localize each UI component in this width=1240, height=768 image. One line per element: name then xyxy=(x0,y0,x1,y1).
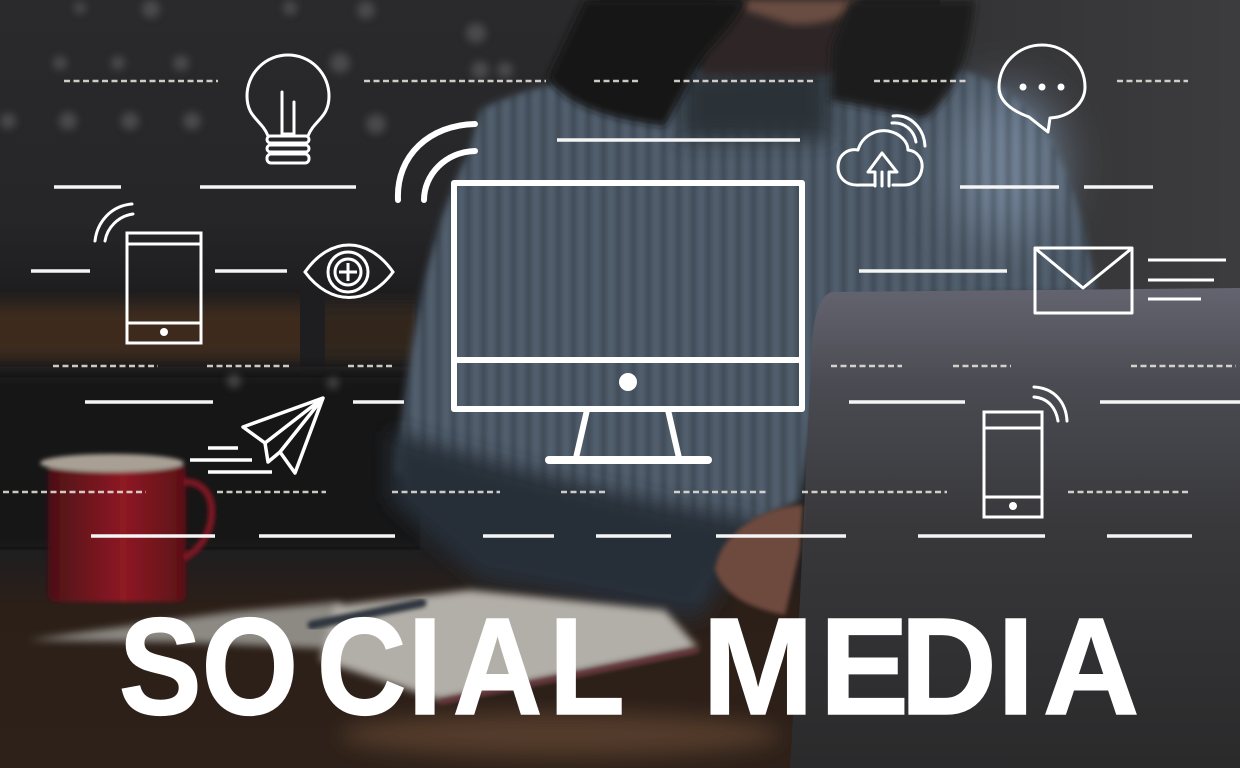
sweater shoulder highlight xyxy=(950,90,1060,240)
skin xyxy=(745,0,860,24)
background: table highlight xyxy=(340,713,780,757)
icon: wifi arcs by monitor xyxy=(398,124,475,200)
icon: envelope with lines xyxy=(1035,248,1226,313)
background: wooden shelf at left xyxy=(0,304,300,360)
hand xyxy=(715,505,803,615)
sweater arm shadow xyxy=(390,430,760,620)
icon: paper plane with speed lines xyxy=(190,398,323,473)
notebook xyxy=(320,590,698,700)
title: SOCIAL xyxy=(119,589,625,743)
notebook red edge xyxy=(440,650,698,702)
sweater xyxy=(395,70,1095,600)
icon: tablet with wifi xyxy=(95,204,201,343)
dashed lines xyxy=(3,81,1236,492)
hair left xyxy=(548,0,745,126)
icon: smartphone with wifi xyxy=(984,387,1067,517)
pen xyxy=(312,603,422,625)
sweater ribs xyxy=(400,70,1095,540)
icon: eye with plus xyxy=(305,245,393,298)
laptop xyxy=(790,288,1240,768)
background: table xyxy=(0,550,960,768)
background: shelf right segment xyxy=(325,304,415,360)
background: dark chair xyxy=(0,372,420,552)
icon: light bulb xyxy=(247,55,329,163)
solid lines xyxy=(31,140,1240,536)
background: bokeh lights xyxy=(0,0,513,389)
title: MEDIA xyxy=(702,589,1139,743)
neck and chin xyxy=(700,0,860,75)
title xyxy=(119,589,1139,743)
collar shadow xyxy=(680,60,830,140)
mug xyxy=(40,454,212,602)
icon: desktop monitor xyxy=(454,183,802,460)
notebook left page xyxy=(28,602,360,650)
icon: cloud upload with wifi xyxy=(838,116,925,186)
background: right wall xyxy=(940,0,1240,360)
background: dark upper-left wall xyxy=(0,0,600,290)
icon: speech bubble xyxy=(999,45,1085,132)
hair right xyxy=(830,0,975,118)
